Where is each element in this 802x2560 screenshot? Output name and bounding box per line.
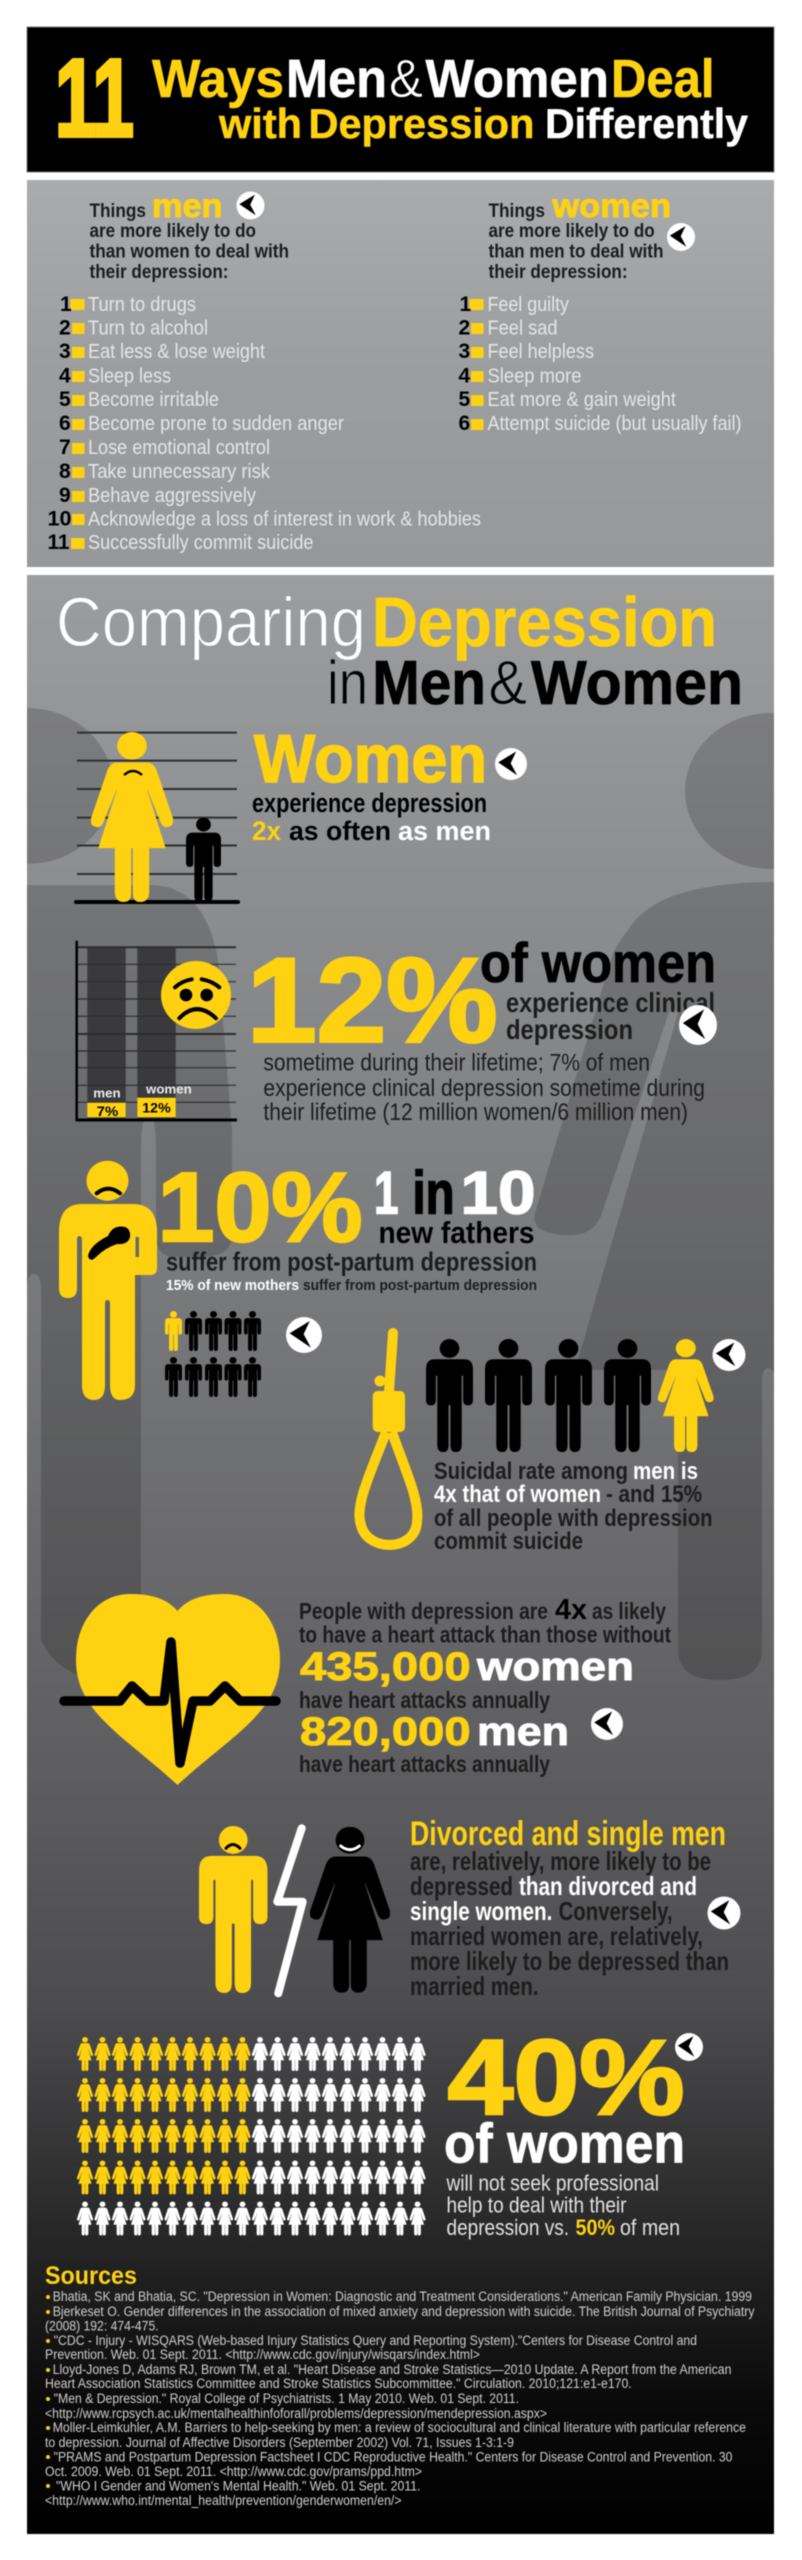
title banner xyxy=(27,27,774,172)
women heading: their depression: xyxy=(488,261,628,283)
help seeking text: will not seek professional xyxy=(446,2171,659,2196)
main heading line one: Comparing xyxy=(56,583,366,661)
source list: Oct. 2009. Web. 01 Sept. 2011. <http://www.cdc.gov/prams/ppd.htm> xyxy=(45,2464,422,2479)
men bar label xyxy=(87,1086,126,1119)
sad yellow man xyxy=(199,1826,268,1993)
women list: 2 xyxy=(458,316,470,340)
men list: 4 xyxy=(59,364,71,388)
arrow icon xyxy=(679,1005,717,1045)
experience clinical depression: depression xyxy=(506,1014,633,1045)
men list: Take unnecessary risk xyxy=(88,461,271,483)
women stat text: 2x xyxy=(252,816,281,846)
heart attack text: as likely xyxy=(592,1598,666,1624)
new fathers: new fathers xyxy=(378,1215,534,1250)
suicide text xyxy=(434,1458,712,1555)
men heading: their depression: xyxy=(90,261,228,283)
help seeking text xyxy=(446,2171,680,2240)
men list: Acknowledge a loss of interest in work & hobbies xyxy=(88,508,481,530)
men heading xyxy=(90,187,289,283)
divorced paragraph: single women. xyxy=(410,1896,552,1926)
men bar label: men xyxy=(93,1086,121,1101)
men heading: than women to deal with xyxy=(90,240,289,262)
title line one xyxy=(152,49,714,109)
men list: Eat less & lose weight xyxy=(88,341,265,363)
suicide text: men is xyxy=(633,1458,698,1485)
source list: Prevention. Web. 01 Sept. 2011. <http://www.cdc.gov/injury/wisqars/index.html> xyxy=(45,2347,480,2362)
arrow icon xyxy=(712,1339,746,1371)
help seeking text: 50% xyxy=(576,2215,615,2240)
title line two xyxy=(218,100,749,147)
new mothers line: 15% of new mothers xyxy=(166,1278,299,1294)
men heading: men xyxy=(152,187,222,224)
arrow icon xyxy=(286,1317,322,1353)
women bar label xyxy=(137,1081,192,1117)
1 in 10: in xyxy=(412,1160,454,1226)
main heading line two: Men xyxy=(372,649,486,718)
main heading line two: & xyxy=(488,649,527,718)
source list: (2008) 192: 474-475. xyxy=(45,2319,159,2334)
icon: noose xyxy=(359,1333,417,1545)
women list: Feel guilty xyxy=(488,294,569,316)
source list: Lloyd-Jones D, Adams RJ, Brown TM, et al. "Heart Disease and Stroke Statistics—2010 Update. A Report from the American xyxy=(53,2362,731,2377)
women stat text xyxy=(252,788,491,846)
men list: Successfully commit suicide xyxy=(88,532,314,554)
women heading: than men to deal with xyxy=(488,240,663,262)
experience clinical depression xyxy=(506,987,715,1045)
title number 11: 11 xyxy=(55,37,134,160)
heart attack text xyxy=(299,1594,671,1648)
men and woman pictogram xyxy=(426,1339,714,1452)
women pictogram grid xyxy=(77,2037,426,2236)
1 in 10 xyxy=(374,1160,536,1226)
435,000 women: women xyxy=(476,1645,634,1689)
heart attack text: 4x xyxy=(555,1594,587,1626)
435,000 women xyxy=(300,1645,634,1689)
women stat text: as men xyxy=(398,816,491,846)
men list: 9 xyxy=(59,484,71,507)
section: suicide xyxy=(359,1333,746,1555)
source list: <http://www.who.int/mental_health/prevention/genderwomen/en/> xyxy=(45,2493,402,2508)
women annual caption: have heart attacks annually xyxy=(299,1687,550,1713)
men list: 8 xyxy=(59,460,71,483)
suicide text: of all people with depression xyxy=(434,1505,712,1532)
820,000 men xyxy=(300,1710,569,1754)
divorced paragraph: depressed xyxy=(410,1871,513,1901)
1 in 10: 10 xyxy=(460,1160,536,1226)
source list: to depression. Journal of Affective Disorders (September 2002) Vol. 71, Issues 1-3:1-9 xyxy=(45,2435,514,2450)
men annual caption: have heart attacks annually xyxy=(299,1751,550,1777)
experience clinical depression: experience clinical xyxy=(506,987,715,1018)
arrow icon men xyxy=(236,192,264,220)
40 percent figure: 40% xyxy=(448,2017,684,2137)
help seeking text: depression vs. xyxy=(446,2215,569,2240)
arrow icon xyxy=(495,748,527,780)
men list: 10 xyxy=(48,508,72,530)
divorced heading: Divorced and single men xyxy=(410,1815,726,1853)
1 in 10: 1 xyxy=(374,1160,398,1226)
tall yellow woman xyxy=(91,732,173,902)
main heading line two: Women xyxy=(531,649,743,718)
section: heart attacks xyxy=(64,1594,671,1785)
happy black woman xyxy=(310,1827,390,1993)
arrow icon women xyxy=(667,223,695,251)
woman frown xyxy=(124,771,142,775)
women list: 3 xyxy=(458,340,470,363)
men list: Sleep less xyxy=(88,366,171,388)
section: divorced and single xyxy=(199,1815,740,2001)
women list: Attempt suicide (but usually fail) xyxy=(488,413,742,435)
divorced paragraph: than divorced and xyxy=(519,1871,697,1901)
men list: Become prone to sudden anger xyxy=(88,413,344,435)
men bar label: 7% xyxy=(97,1103,119,1119)
title line two: Differently xyxy=(545,100,749,147)
820,000 men: 820,000 xyxy=(300,1710,471,1754)
arrow icon xyxy=(708,1896,740,1930)
main heading line two xyxy=(327,649,743,718)
source list: Bhatia, SK and Bhatia, SC. "Depression in Women: Diagnostic and Treatment Considerations." American Family Physician. 1999 xyxy=(53,2289,752,2304)
section: clinical depression 12 percent xyxy=(76,931,717,1126)
title line two: Depression xyxy=(308,100,534,147)
source list: <http://www.rcpsych.ac.uk/mentalhealthinfoforall/problems/depression/mendepression.aspx> xyxy=(45,2406,547,2421)
women heading: Things xyxy=(488,200,545,222)
heart attack text: to have a heart attack than those without xyxy=(299,1622,671,1648)
women bar label: 12% xyxy=(142,1100,171,1116)
heart attack text: People with depression are xyxy=(299,1598,548,1624)
title line one: Men xyxy=(286,49,387,109)
icon: heart with ecg xyxy=(64,1594,280,1785)
men heading: Things xyxy=(90,200,146,222)
divorced paragraph: married women are, relatively, xyxy=(410,1921,703,1951)
arrow icon xyxy=(675,2033,703,2061)
section: new fathers xyxy=(59,1152,537,1400)
suicide text: Suicidal rate among xyxy=(434,1458,628,1485)
10 percent figure: 10% xyxy=(158,1152,362,1262)
820,000 men: men xyxy=(477,1710,569,1754)
men list: Lose emotional control xyxy=(88,437,270,459)
new mothers line: suffer from post-partum depression xyxy=(303,1278,537,1294)
divorced paragraph: Conversely, xyxy=(559,1896,673,1926)
lifetime paragraph xyxy=(263,1050,705,1126)
men list: Turn to alcohol xyxy=(88,318,208,340)
panel: comparing depression xyxy=(0,575,802,2534)
new mothers line xyxy=(166,1278,537,1294)
panel: things men and women do xyxy=(27,180,774,567)
suicide text: - and 15% xyxy=(606,1481,702,1508)
main heading line one xyxy=(56,583,717,661)
source bullets xyxy=(46,2295,50,2488)
main heading line two: in xyxy=(327,649,368,718)
section: women twice as often xyxy=(76,721,527,902)
short black man xyxy=(186,818,221,902)
men list: 7 xyxy=(59,436,71,459)
of women heading: of women xyxy=(480,931,716,994)
women list: 5 xyxy=(458,388,470,411)
women heading: are more likely to do xyxy=(488,220,655,242)
section: 40 percent xyxy=(77,2017,703,2240)
men list: 2 xyxy=(59,316,71,340)
men list: Turn to drugs xyxy=(88,294,196,316)
help seeking text: of men xyxy=(620,2215,680,2240)
source list: "CDC - Injury - WISQARS (Web-based Injury Statistics Query and Reporting System)."Centers for Disease Control and xyxy=(54,2333,697,2348)
title line one: Deal xyxy=(611,49,714,109)
title line one: Ways xyxy=(152,49,284,109)
title line one: Women xyxy=(426,49,609,109)
of women: of women xyxy=(444,2112,685,2175)
lifetime paragraph: experience clinical depression sometime during xyxy=(263,1075,705,1102)
435,000 women: 435,000 xyxy=(300,1645,471,1689)
source list: Moller-Leimkuhler, A.M. Barriers to help-seeking by men: a review of sociocultural and clinical literature with particular reference xyxy=(53,2420,746,2435)
icon: sad face xyxy=(161,961,231,1029)
icon: big man with heart xyxy=(59,1161,157,1400)
men heading: are more likely to do xyxy=(90,220,256,242)
12 percent figure: 12% xyxy=(247,934,498,1068)
men list: Become irritable xyxy=(88,389,219,411)
men list: 11 xyxy=(48,531,70,554)
source list xyxy=(45,2289,755,2508)
source list: "Men & Depression." Royal College of Psychiatrists. 1 May 2010. Web. 01 Sept. 2011. xyxy=(54,2391,519,2406)
title line two: with xyxy=(218,100,302,147)
women list: 4 xyxy=(458,364,470,388)
help seeking text: help to deal with their xyxy=(446,2193,627,2218)
title line one: & xyxy=(389,49,423,109)
women heading: women xyxy=(551,187,671,224)
women list: Sleep more xyxy=(488,366,582,388)
sources heading: Sources xyxy=(45,2262,137,2290)
women list: Feel sad xyxy=(488,318,558,340)
source list: "PRAMS and Postpartum Depression Factsheet I CDC Reproductive Health." Centers for Disease Control and Prevention. 30 xyxy=(54,2450,732,2465)
suffer from post-partum depression: suffer from post-partum depression xyxy=(166,1246,537,1276)
women stat text: experience depression xyxy=(252,788,487,818)
divorced paragraph: married men. xyxy=(410,1971,539,2001)
suicide text: commit suicide xyxy=(434,1528,583,1555)
women list: 6 xyxy=(458,412,470,435)
background silhouettes xyxy=(0,708,802,1680)
men list xyxy=(48,293,481,554)
arrow icon xyxy=(591,1708,623,1740)
divorced paragraph xyxy=(410,1846,729,2001)
women heading: Women xyxy=(254,721,487,797)
1 in 10 pictogram xyxy=(165,1311,261,1397)
source list: "WHO I Gender and Women's Mental Health." Web. 01 Sept. 2011. xyxy=(56,2479,420,2494)
lifetime paragraph: sometime during their lifetime; 7% of men xyxy=(263,1050,650,1077)
suicide text: 4x that of women xyxy=(434,1481,601,1508)
men list: 1 xyxy=(60,293,72,316)
women bar label: women xyxy=(145,1081,192,1096)
men list: Behave aggressively xyxy=(88,485,256,507)
height chart xyxy=(76,732,238,902)
lifetime paragraph: their lifetime (12 million women/6 million men) xyxy=(263,1099,688,1126)
women list: Eat more & gain weight xyxy=(488,389,676,411)
source list: Bjerkeset O. Gender differences in the association of mixed anxiety and depression with suicide. The British Journal of Psychiatry xyxy=(53,2304,755,2319)
women heading xyxy=(488,187,671,283)
men list: 3 xyxy=(59,340,71,363)
divorced paragraph: are, relatively, more likely to be xyxy=(410,1846,711,1876)
source list: Heart Association Statistics Committee and Stroke Statistics Subcommittee." Circulation. 2010;121:e1-e170. xyxy=(45,2376,632,2391)
bar chart xyxy=(76,941,237,1121)
sources xyxy=(45,2262,755,2508)
main heading line one: Depression xyxy=(372,583,717,661)
women list xyxy=(458,293,742,435)
lightning bolt xyxy=(277,1828,303,1993)
women list: Feel helpless xyxy=(488,341,594,363)
men list: 6 xyxy=(59,412,71,435)
women stat text: as often xyxy=(289,816,391,846)
women list: 1 xyxy=(460,293,472,316)
men list: 5 xyxy=(59,388,71,411)
